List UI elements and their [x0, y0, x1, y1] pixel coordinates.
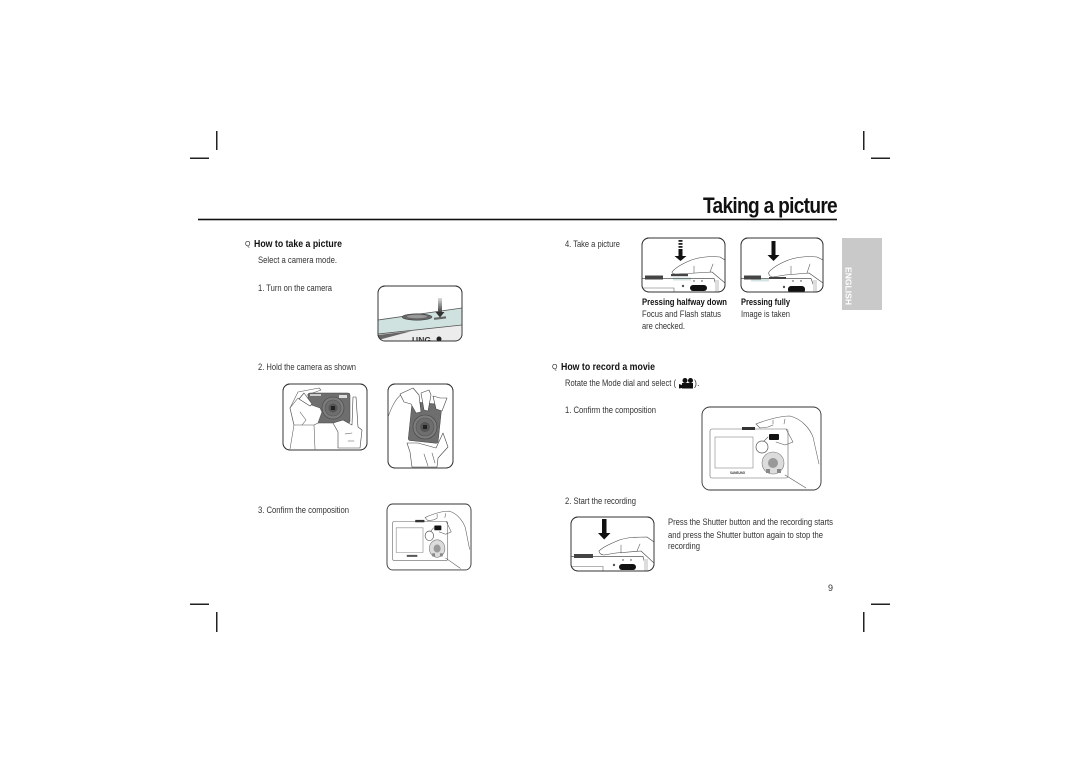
illustration: confirm composition (movie): SAMSUNG	[730, 471, 745, 475]
caption: pressing halfway down: Pressing halfway down	[642, 297, 727, 307]
illustration: turn on the camera: UNG	[412, 335, 431, 345]
text: recording instructions: recording	[668, 541, 700, 551]
crop marks	[190, 131, 890, 632]
title: Taking a picture	[703, 193, 837, 218]
illustration: shutter half press	[642, 238, 725, 292]
illustration: confirm composition (photo)	[387, 504, 471, 570]
step 1 label: movie: 1. Confirm the composition	[565, 405, 656, 415]
step 3 label: 3. Confirm the composition	[258, 505, 349, 515]
caption: pressing fully	[741, 297, 790, 319]
caption: pressing fully: Pressing fully	[741, 297, 790, 307]
icon: movie camera	[679, 378, 693, 388]
step 2 label: movie: 2. Start the recording	[565, 496, 636, 506]
page number: 9	[828, 583, 833, 593]
text: select a camera mode: Select a camera mode.	[258, 255, 337, 265]
text: recording instructions: Press the Shutter button and the recording starts	[668, 517, 833, 527]
caption: pressing halfway down: are checked.	[642, 321, 685, 331]
heading: how to take a picture: Q	[245, 241, 251, 248]
heading: how to take a picture: How to take a picture	[254, 239, 342, 250]
illustration: shutter full press	[741, 238, 823, 293]
text: recording instructions: and press the Shutter button again to stop the	[668, 530, 823, 540]
step 2 label: 2. Hold the camera as shown	[258, 362, 356, 372]
step 4 label: 4. Take a picture	[565, 239, 620, 249]
heading: how to record a movie: How to record a movie	[561, 362, 655, 373]
step 1 label: 1. Turn on the camera	[258, 283, 332, 293]
caption: pressing halfway down	[642, 297, 727, 331]
text: rotate the mode dial: ).	[694, 378, 699, 388]
language tab	[842, 238, 882, 310]
illustration: confirm composition (movie)	[702, 407, 821, 490]
caption: pressing halfway down: Focus and Flash status	[642, 309, 721, 319]
illustration: turn on the camera	[378, 286, 462, 345]
language tab: ENGLISH	[844, 267, 852, 305]
text: recording instructions	[668, 517, 833, 551]
heading: how to record a movie: Q	[552, 364, 558, 371]
text: rotate the mode dial: Rotate the Mode dial and select (	[565, 378, 676, 388]
illustration: start recording	[571, 517, 654, 571]
illustration: landscape grip	[283, 384, 367, 450]
caption: pressing fully: Image is taken	[741, 309, 790, 319]
illustration: portrait grip	[388, 384, 453, 468]
